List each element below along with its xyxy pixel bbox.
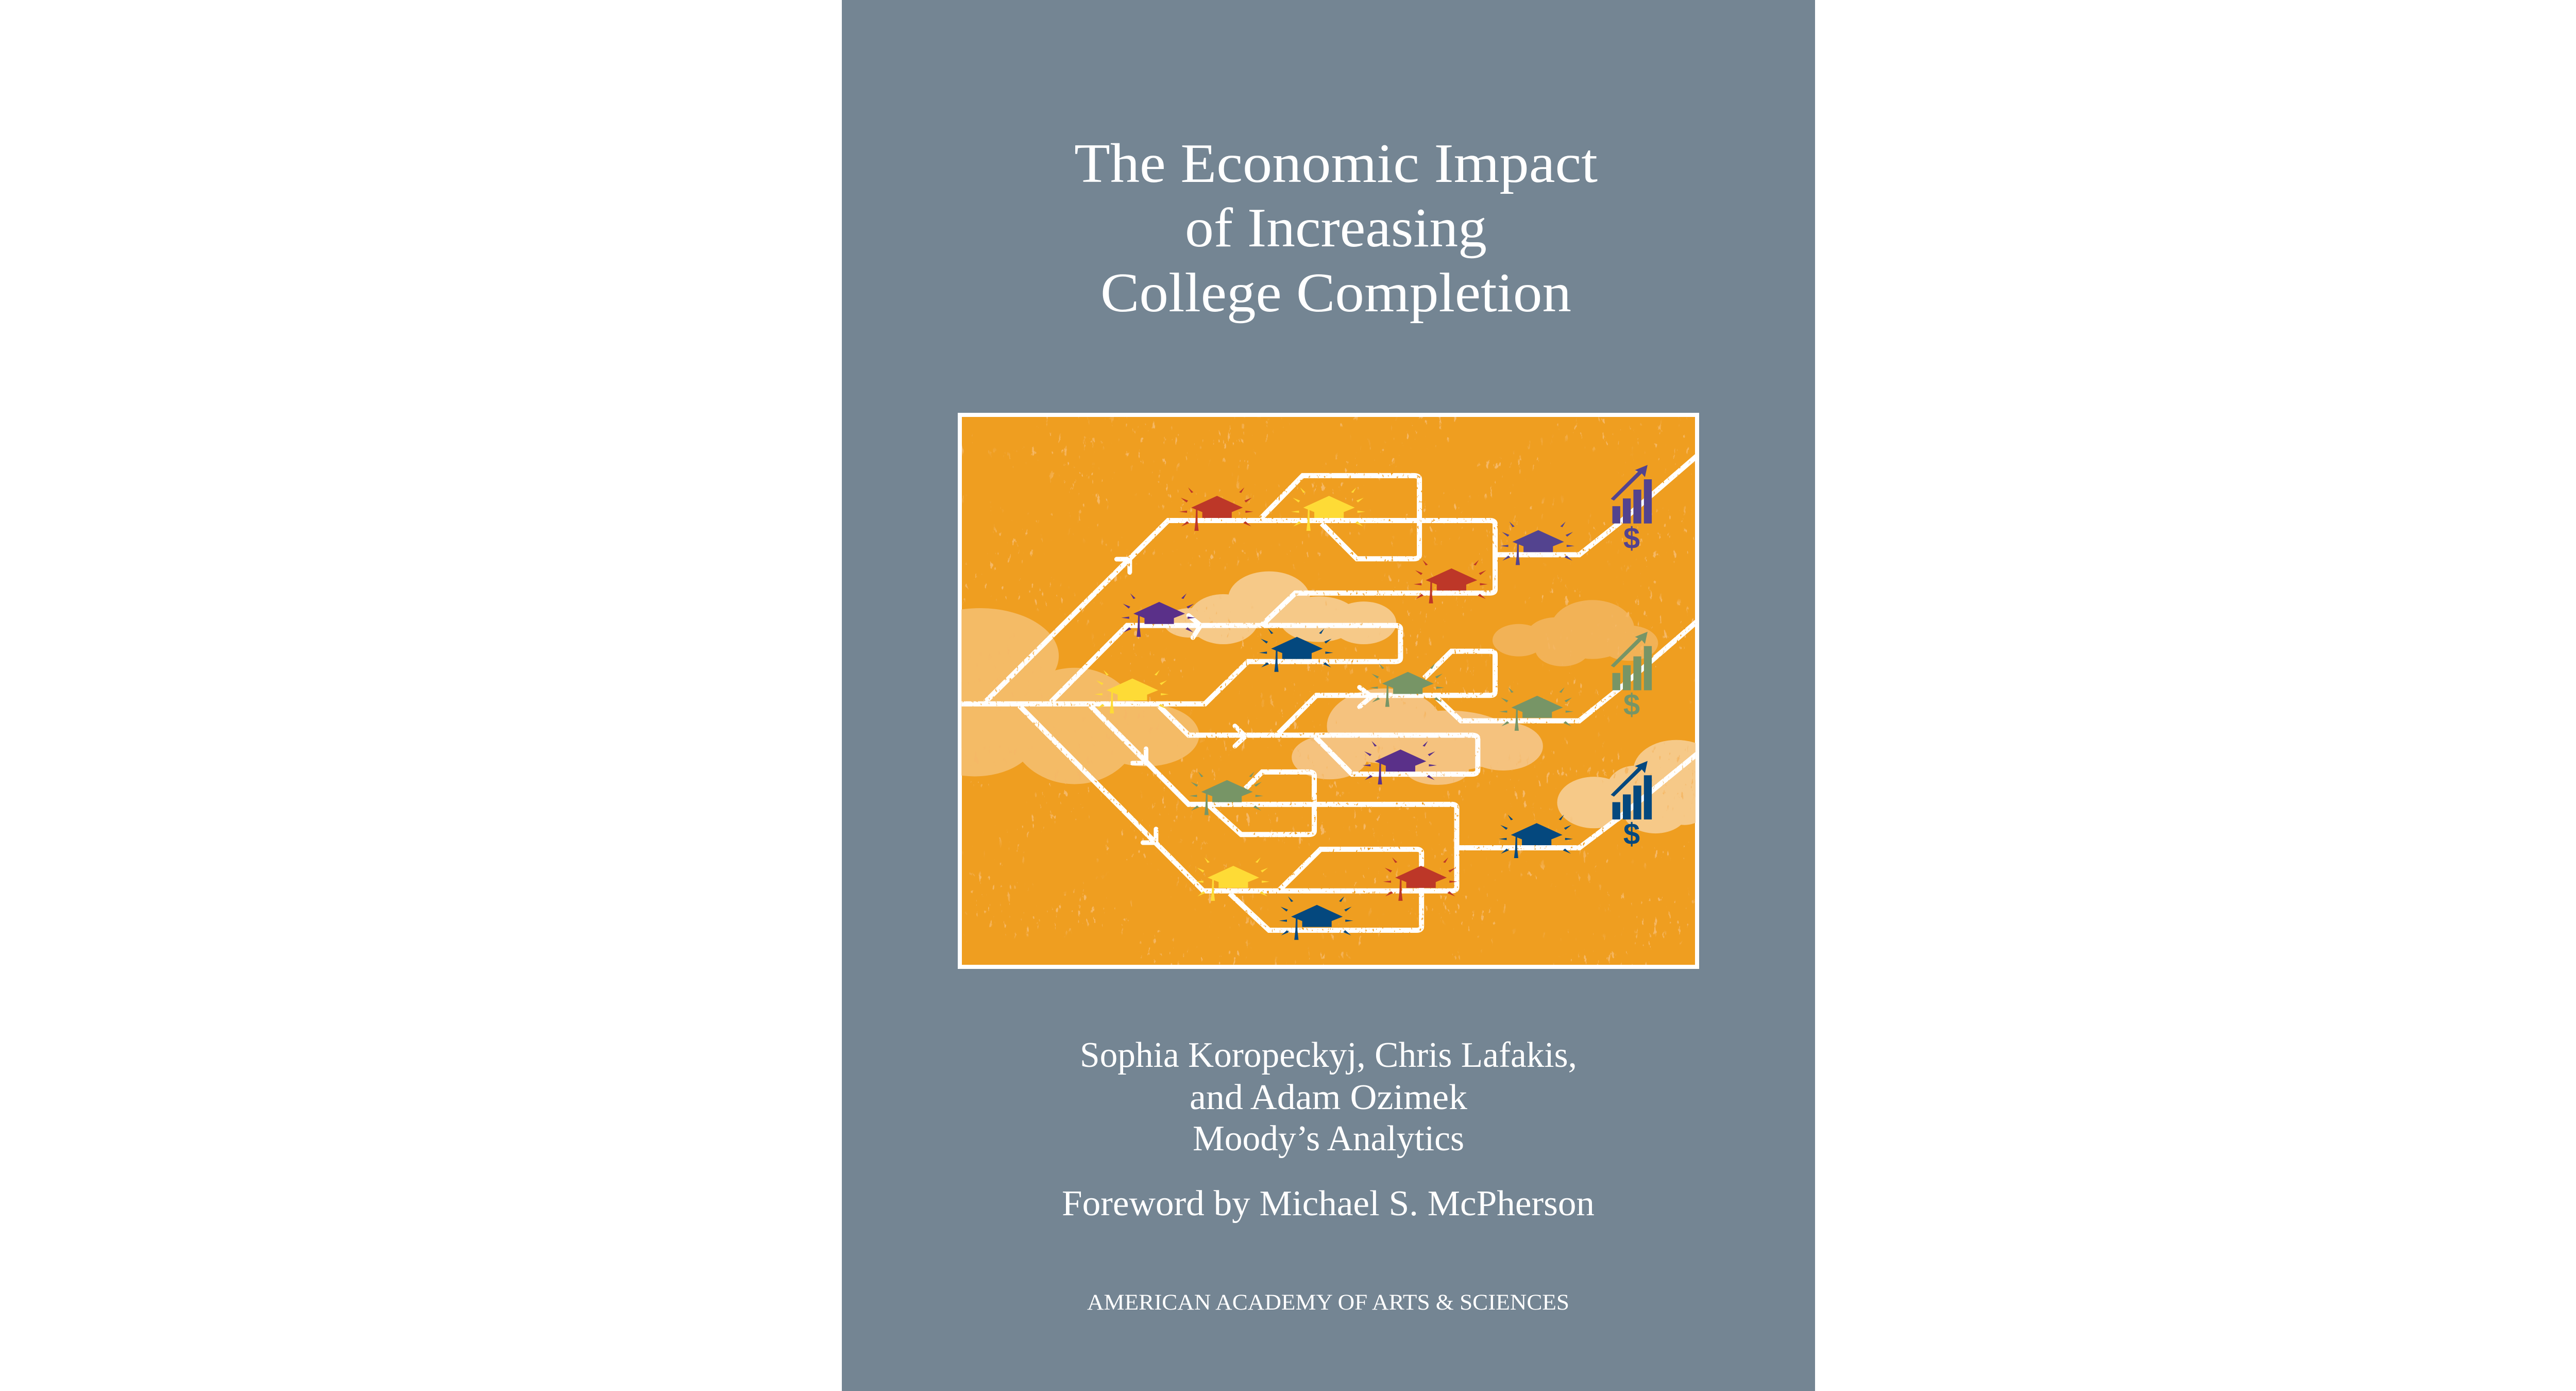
- publisher: AMERICAN ACADEMY OF ARTS & SCIENCES: [1087, 1291, 1569, 1315]
- arrows: [1116, 559, 1371, 843]
- grunge texture: [962, 417, 1695, 965]
- title: [1074, 133, 1598, 324]
- icon: green cap: [1189, 772, 1263, 815]
- path: lower loop: [1230, 849, 1421, 930]
- path: central trunk loop: [961, 626, 1400, 704]
- path: lower outcome: [1457, 753, 1698, 848]
- authors: and Adam Ozimek: [1190, 1078, 1467, 1117]
- cloud: centre: [1292, 689, 1543, 785]
- path: middle upper loop: [1279, 651, 1495, 733]
- panel: book cover background: [842, 0, 1815, 1391]
- icon: navy growth chart with dollar: $: [1623, 817, 1640, 851]
- icon: yellow cap: [1195, 858, 1269, 901]
- graduation caps: [1094, 488, 1574, 940]
- arrow: lower one: [1132, 749, 1146, 763]
- icon: navy cap: [1499, 815, 1573, 858]
- authors: Sophia Koropeckyj, Chris Lafakis,: [1080, 1035, 1577, 1075]
- path: small inner loop: [1209, 772, 1314, 834]
- icon: red cap: [1414, 560, 1488, 604]
- clouds: [961, 571, 1696, 834]
- title: College Completion: [1100, 262, 1571, 324]
- icon: navy cap: [1259, 628, 1333, 672]
- path: middle outcome: [1437, 621, 1698, 721]
- icon: green growth chart with dollar: [1611, 632, 1652, 722]
- illustration frame and orange background: [960, 415, 1697, 967]
- icon: red cap: [1179, 488, 1253, 531]
- arrow: middle upper: [1360, 688, 1371, 707]
- icon: indigo cap: [1500, 522, 1574, 565]
- icon: navy growth chart with dollar: [1611, 761, 1652, 851]
- cloud: upper right: [1493, 600, 1658, 666]
- path: middle route: [1159, 706, 1478, 774]
- title: The Economic Impact: [1074, 133, 1598, 194]
- arrow: upper: [1116, 559, 1130, 573]
- path: upper outcome: [1495, 456, 1698, 555]
- path: lower route: [1020, 706, 1457, 891]
- icon: purple cap: [1363, 741, 1437, 784]
- cloud: lower right: [1557, 740, 1696, 834]
- path: upper side loop: [1261, 476, 1419, 559]
- authors: [1080, 1035, 1577, 1159]
- icon: green cap: [1499, 688, 1573, 731]
- icon: navy cap: [1279, 896, 1353, 940]
- icon: yellow cap: [1094, 670, 1168, 713]
- title: of Increasing: [1185, 197, 1487, 259]
- arrow: middle: [1235, 726, 1245, 746]
- arrow: lower two: [1143, 829, 1156, 843]
- foreword credit: Foreword by Michael S. McPherson: [1062, 1184, 1595, 1224]
- icon: purple growth chart with dollar: $: [1623, 522, 1640, 555]
- icon: purple growth chart with dollar: [1611, 465, 1652, 555]
- cloud: far left: [961, 608, 1199, 784]
- cloud: upper centre: [1164, 572, 1396, 644]
- icon: green growth chart with dollar: $: [1623, 688, 1640, 722]
- icon: green cap: [1370, 663, 1444, 707]
- icon: yellow cap: [1291, 488, 1365, 531]
- pathways: [961, 456, 1698, 930]
- icon: purple cap: [1122, 593, 1195, 637]
- path: upper route: [985, 521, 1495, 702]
- icon: red cap: [1383, 858, 1458, 901]
- arrow: centre trunk: [1189, 615, 1201, 638]
- authors: Moody’s Analytics: [1193, 1119, 1464, 1159]
- panel: cover illustration: [901, 415, 1720, 967]
